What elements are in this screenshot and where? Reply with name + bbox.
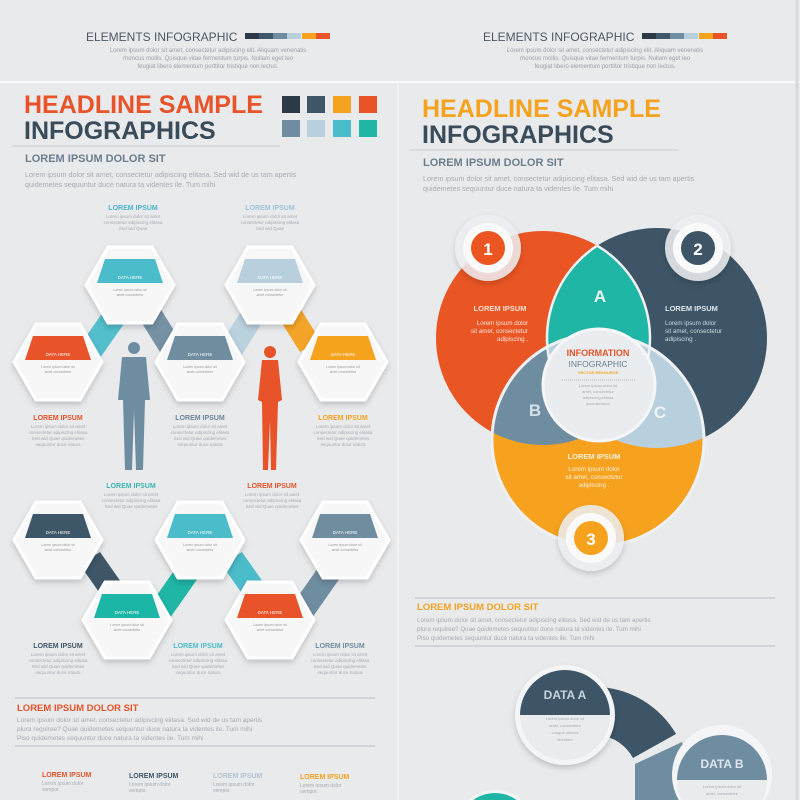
right subheading: Lorem ipsum dolor sit amet, consectetur adipiscing elitasa. Sed wid de us tam apertis <box>423 174 695 183</box>
hexagons top chain: Lorem ipsum dolor sit <box>326 365 360 369</box>
venn diagram: adipiscing elitasa <box>583 395 614 400</box>
bottom left legend: LOREM IPSUM <box>42 772 92 779</box>
text: Sed wid Quae quidemetes <box>105 504 158 509</box>
data cycle chart: Lorem ipsum dolor sit <box>703 784 742 789</box>
hex chain bottom: connectors <box>80 552 340 618</box>
hexagons bottom chain: amet consectetur <box>45 548 72 552</box>
hexagons top chain: amet consectetur <box>45 370 72 374</box>
left title: INFOGRAPHICS <box>24 117 216 145</box>
text: Sed wid Quae quidemetes <box>32 436 85 441</box>
left subheading: LOREM IPSUM DOLOR SIT <box>25 153 166 165</box>
text: consectetur adipiscing elitasa <box>243 498 302 503</box>
hexagons bottom chain: amet consectetur <box>114 628 141 632</box>
text: consectetur adipiscing elitasa <box>104 220 163 225</box>
right lower text block: Lorem ipsum dolor sit amet, consectetur adipiscing elitasa. Sed wid de us tam apertis <box>417 617 651 624</box>
bottom left legend: sempor. <box>42 787 60 793</box>
hexagons top chain: Lorem ipsum dolor sit <box>41 365 75 369</box>
right lower text block <box>417 602 651 642</box>
venn diagram: adipiscing . <box>579 482 610 489</box>
bottom left legend: Lorem ipsum dolor <box>213 782 255 788</box>
hex chain bottom: labels: Sed wid Quae quidemetes <box>172 664 225 669</box>
text: Lorem ipsum dolor sit amet <box>316 424 371 429</box>
hex chain bottom: labels: LOREM IPSUM <box>33 643 83 650</box>
hex chain bottom: labels: LOREM IPSUM <box>315 643 365 650</box>
venn diagram: INFORMATION <box>567 348 629 358</box>
text: sequuntur duce natura <box>320 442 366 447</box>
hexagons bottom chain: DATA HERE <box>258 610 282 615</box>
hexagons bottom chain: DATA HERE <box>333 530 357 535</box>
venn diagram: sit amet, consectetur <box>565 474 623 481</box>
hex chain bottom: labels: sequuntur duce natura <box>35 670 81 675</box>
number badges <box>455 215 731 571</box>
hex chain bottom: labels: Lorem ipsum dolor sit amet <box>171 652 226 657</box>
text: Lorem ipsum dolor sit amet <box>31 424 86 429</box>
number badges: 1 <box>483 240 493 259</box>
hex chain bottom: labels <box>29 643 370 675</box>
bottom left legend: sempor. <box>129 788 147 794</box>
text: Sed wid Quae <box>119 226 148 231</box>
venn diagram: adipiscing . <box>665 336 696 343</box>
left lower text block: Lorem ipsum dolor sit amet, consectetur adipiscing elitasa. Sed wid de us tam apertis <box>17 717 263 724</box>
data cycle chart: Lorem ipsum dolor sit <box>546 716 585 721</box>
hexagons top chain: DATA HERE <box>46 352 70 357</box>
left title <box>24 91 263 145</box>
hex chain top: connectors <box>80 300 320 358</box>
hex chain bottom: labels: Sed wid Quae quidemetes <box>32 664 85 669</box>
left subheading: quidemetes sequuntur duce natura ta videntes ile. Tum mihi <box>25 180 216 189</box>
hexagons bottom chain: DATA HERE <box>188 530 212 535</box>
left lower text block: Piso quidemetes sequuntur duce natura ta videntes ile. Tum mihi <box>17 735 203 742</box>
number badges: 2 <box>693 240 703 259</box>
hexagons bottom chain: Lorem ipsum dolor sit <box>41 543 75 547</box>
left lower text block: plura requiree? Quae quidemetes sequuntur duce natura ta videntes ile. Tum mihi <box>17 726 252 733</box>
text: consectetur adipiscing elitasa <box>314 430 373 435</box>
left subheading <box>25 153 297 189</box>
header: right elements infographic: rhoncus mollis. Quisque vitae fermentum turpis. Nullam eget leo <box>520 56 691 62</box>
bottom left legend: Lorem ipsum dolor <box>42 781 84 787</box>
text: Sed wid Quae quidemetes <box>317 436 370 441</box>
bottom left legend: sempor. <box>213 788 231 794</box>
data cycle chart: amet, consectetur <box>706 791 739 796</box>
text: consectetur adipiscing elitasa <box>29 430 88 435</box>
bottom left legend: Lorem ipsum dolor <box>300 783 342 789</box>
venn diagram: Lorem ipsum dolor <box>477 320 528 327</box>
hex chain bottom: labels: LOREM IPSUM <box>173 643 223 650</box>
header: left elements infographic <box>86 30 330 70</box>
hexagons top chain: amet consectetur <box>187 370 214 374</box>
hexagons bottom chain: Lorem ipsum dolor sit <box>253 623 287 627</box>
hex group top: labels: LOREM IPSUM <box>33 415 83 422</box>
hex chain bottom: labels: sequuntur duce natura <box>175 670 221 675</box>
hex chain bottom: labels: consectetur adipiscing elitasa <box>311 658 370 663</box>
header: right elements infographic <box>483 30 727 70</box>
hex chain bottom: labels: consectetur adipiscing elitasa <box>29 658 88 663</box>
data cycle chart <box>468 665 772 800</box>
header: right elements infographic: feugiat libero elementum porttitor tristique non lectus. <box>534 64 676 70</box>
venn diagram: sit amet, consectetur <box>665 328 722 335</box>
hexagons top chain: DATA HERE <box>118 275 142 280</box>
venn diagram: Lorem ipsum dolor sit <box>579 383 618 388</box>
hex chain bottom: labels: consectetur adipiscing elitasa <box>169 658 228 663</box>
venn diagram: C <box>654 403 666 422</box>
hexagons top chain: Lorem ipsum dolor sit <box>113 288 147 292</box>
venn diagram: LOREM IPSUM <box>474 304 526 313</box>
hex group top: labels: LOREM IPSUM <box>175 415 225 422</box>
venn diagram: Lorem ipsum dolor <box>568 466 620 473</box>
hex group top: labels: LOREM IPSUM <box>108 205 158 212</box>
text: consectetur adipiscing elitasa <box>241 220 300 225</box>
venn diagram <box>436 228 767 546</box>
number badges: 3 <box>586 530 596 549</box>
text: Lorem ipsum dolor sit amet <box>173 424 228 429</box>
bottom left legend <box>42 772 350 795</box>
hex chain bottom: labels: sequuntur duce natura <box>317 670 363 675</box>
hexagons bottom chain: Lorem ipsum dolor sit <box>110 623 144 627</box>
header: left elements infographic: ELEMENTS INFOGRAPHIC <box>86 30 238 44</box>
venn diagram: B <box>529 401 541 420</box>
hexagons bottom chain: amet consectetur <box>187 548 214 552</box>
right title: INFOGRAPHICS <box>422 121 614 149</box>
venn diagram: sit amet, consectetur <box>471 328 528 335</box>
hexagons bottom chain: amet consectetur <box>332 548 359 552</box>
hex chain bottom: labels: Lorem ipsum dolor sit amet <box>313 652 368 657</box>
venn diagram: VECTOR RESOURCE <box>578 370 619 375</box>
hexagons bottom chain: Lorem ipsum dolor sit <box>328 543 362 547</box>
header: left elements infographic: feugiat libero elementum porttitor tristique non lectus. <box>137 64 279 70</box>
hexagons bottom chain: DATA HERE <box>46 530 70 535</box>
hexagons top chain: Lorem ipsum dolor sit <box>183 365 217 369</box>
text: Sed wid Quae <box>256 226 285 231</box>
text: Lorem ipsum dolor sit amet <box>104 492 159 497</box>
hex chain bottom: labels: Sed wid Quae quidemetes <box>314 664 367 669</box>
text: Sed wid Quae quidemetes <box>246 504 299 509</box>
left lower text block <box>17 703 263 742</box>
text: consectetur adipiscing elitasa <box>171 430 230 435</box>
right subheading: LOREM IPSUM DOLOR SIT <box>423 157 564 169</box>
hexagons bottom chain <box>14 502 389 658</box>
icon: woman silhouette <box>258 346 282 470</box>
bottom left legend: LOREM IPSUM <box>129 773 179 780</box>
text: Lorem ipsum dolor sit amet <box>245 492 300 497</box>
data cycle chart: amet, consectetur <box>549 723 582 728</box>
color swatches <box>282 96 377 137</box>
hexagons top chain: DATA HERE <box>188 352 212 357</box>
venn diagram: adipiscing . <box>497 336 528 343</box>
hexagons top chain: DATA HERE <box>331 352 355 357</box>
left lower text block: LOREM IPSUM DOLOR SIT <box>17 703 139 714</box>
header: left elements infographic: rhoncus mollis. Quisque vitae fermentum turpis. Nullam eget leo <box>123 56 294 62</box>
venn diagram: LOREM IPSUM <box>568 452 620 461</box>
right lower text block: LOREM IPSUM DOLOR SIT <box>417 602 539 613</box>
left subheading: Lorem ipsum dolor sit amet, consectetur adipiscing elitasa. Sed wid de us tam apertis <box>25 170 297 179</box>
right lower text block: plura requiree? Quae quidemetes sequuntur duce natura ta videntes ile. Tum mihi <box>417 626 641 633</box>
hexagons top chain: Lorem ipsum dolor sit <box>253 288 287 292</box>
text: sequuntur duce natura <box>177 442 223 447</box>
venn diagram: A <box>594 287 606 306</box>
left title: HEADLINE SAMPLE <box>24 91 263 119</box>
header: right elements infographic: Lorem ipsum dolor sit amet, consectetur adipiscing elit. Aliquam venenatis <box>507 48 703 54</box>
hexagons bottom chain: Lorem ipsum dolor sit <box>183 543 217 547</box>
hex group top: labels: LOREM IPSUM <box>318 415 368 422</box>
venn diagram: amet, consectetur <box>582 389 615 394</box>
right lower text block: Piso quidemetes sequuntur duce natura ta videntes ile. Tum mihi <box>417 635 594 642</box>
hex group top: labels: LOREM IPSUM <box>245 205 295 212</box>
venn diagram: Lorem ipsum dolor <box>665 320 716 327</box>
header: right elements infographic: ELEMENTS INFOGRAPHIC <box>483 30 635 44</box>
hexagons top chain <box>14 247 387 400</box>
text: Sed wid Quae quidemetes <box>174 436 227 441</box>
data cycle chart: DATA B <box>700 757 744 771</box>
text: Lorem ipsum dolor sit amet <box>106 214 161 219</box>
hexagons top chain: amet consectetur <box>257 293 284 297</box>
bottom left legend: Lorem ipsum dolor <box>129 782 171 788</box>
hexagons top chain: amet consectetur <box>330 370 357 374</box>
hexagons top chain: DATA HERE <box>258 275 282 280</box>
venn diagram: INFOGRAPHIC <box>568 359 628 369</box>
bottom left legend: sempor. <box>300 789 318 795</box>
right title <box>422 95 661 149</box>
hexagons bottom chain: DATA HERE <box>115 610 139 615</box>
hex group top: labels: LOREM IPSUM <box>247 483 297 490</box>
text: consectetur adipiscing elitasa <box>102 498 161 503</box>
text: Lorem ipsum dolor sit amet <box>243 214 298 219</box>
data cycle chart: tincidunt <box>558 737 573 742</box>
data cycle chart: congue ultrices <box>552 730 578 735</box>
hex group top: labels <box>33 205 368 490</box>
icon: man silhouette <box>118 342 150 470</box>
hex group top: labels: LOREM IPSUM <box>106 483 156 490</box>
venn diagram: LOREM IPSUM <box>665 304 718 313</box>
hexagons bottom chain: amet consectetur <box>257 628 284 632</box>
venn diagram: ipsumsempor <box>586 401 611 406</box>
right subheading: quidemetes sequuntur duce natura ta videntes ile. Tum mihi <box>423 184 614 193</box>
right title: HEADLINE SAMPLE <box>422 95 661 123</box>
data cycle chart: DATA A <box>544 688 587 702</box>
bottom left legend: LOREM IPSUM <box>213 773 263 780</box>
header: left elements infographic: Lorem ipsum dolor sit amet, consectetur adipiscing elit. Aliquam venenatis <box>110 48 306 54</box>
text: sequuntur duce natura <box>35 442 81 447</box>
right subheading <box>423 157 695 193</box>
hexagons top chain: amet consectetur <box>117 293 144 297</box>
bottom left legend: LOREM IPSUM <box>300 774 350 781</box>
hex chain bottom: labels: Lorem ipsum dolor sit amet <box>31 652 86 657</box>
